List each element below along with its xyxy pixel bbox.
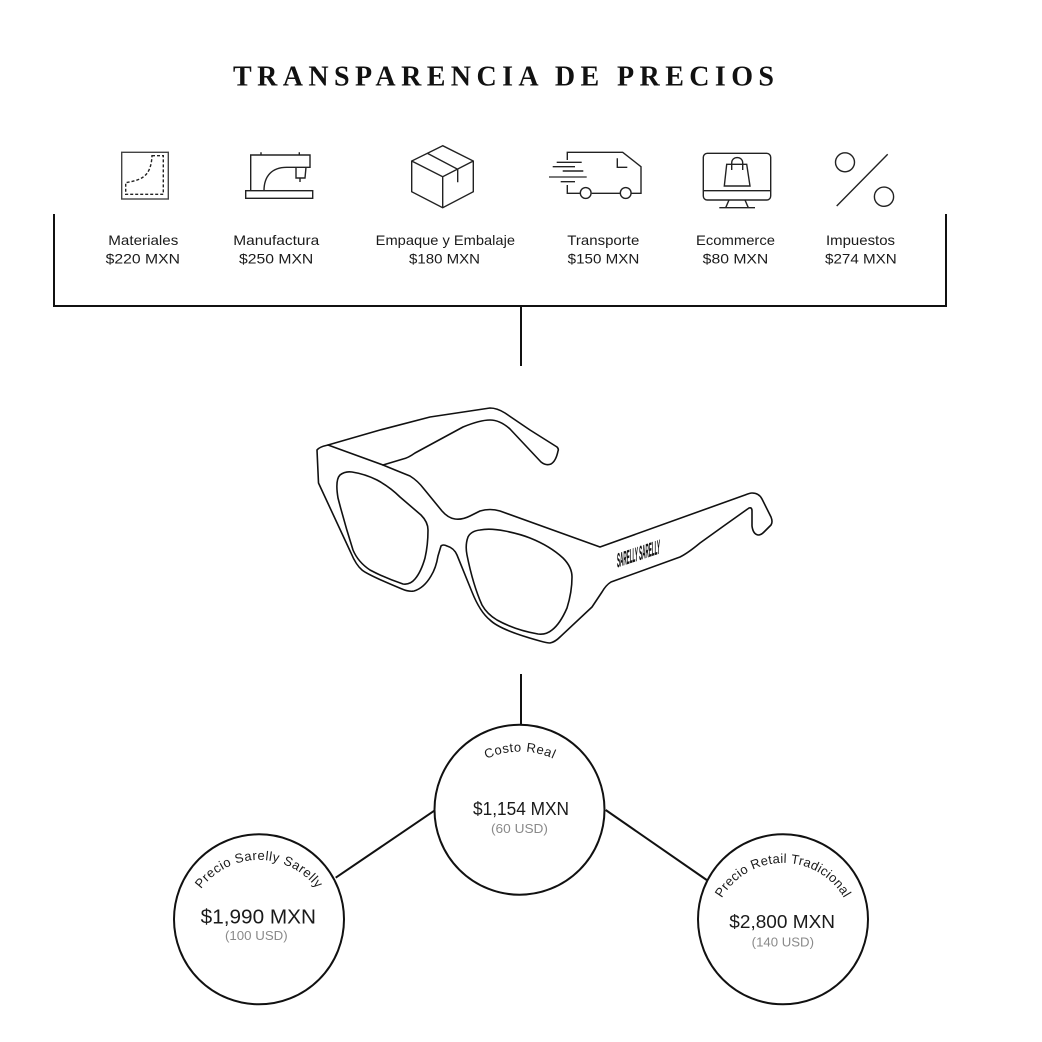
right lens (466, 529, 572, 634)
icon: percent sign (836, 153, 894, 206)
icon: sewing machine (246, 152, 313, 198)
icon: box (412, 146, 473, 208)
illustration: sunglasses: SARELLY SARELLY (617, 536, 660, 572)
glasses frame and near temple (317, 445, 772, 643)
usd: precio sarelly: (100 USD) (225, 928, 288, 943)
item: empaque y embalaje (376, 146, 515, 266)
usd: precio retail: (140 USD) (752, 935, 814, 950)
curved label: precio retail tradicional: Precio Retail Tradicional (714, 853, 852, 898)
label: transporte: Transporte (567, 232, 640, 248)
price: materiales: $220 MXN (106, 250, 180, 266)
left lens (337, 472, 428, 584)
price: transporte: $150 MXN (568, 250, 639, 266)
connector: real cost to retail price (606, 810, 707, 880)
curved label: costo real: Costo Real (484, 742, 556, 758)
price: precio retail: $2,800 MXN (729, 911, 835, 932)
illustration: sunglasses (317, 408, 772, 643)
item: impuestos (825, 153, 897, 266)
panel: cost breakdown (54, 146, 946, 306)
item: manufactura (233, 152, 320, 266)
price: ecommerce: $80 MXN (703, 250, 768, 266)
connector: glasses to real cost (520, 674, 522, 725)
bracket around cost items (54, 214, 946, 306)
title: TRANSPARENCIA DE PRECIOS (233, 62, 774, 92)
price: manufactura: $250 MXN (239, 250, 313, 266)
far temple (328, 408, 558, 465)
icon: fabric pattern (122, 152, 168, 199)
item: transporte (549, 152, 641, 266)
item: ecommerce (696, 153, 775, 266)
label: materiales: Materiales (108, 232, 178, 248)
circle: precio retail tradicional (697, 833, 869, 1006)
price: impuestos: $274 MXN (825, 250, 897, 266)
curved label: precio sarelly sarelly: Precio Sarelly Sarelly (194, 850, 322, 888)
price: precio sarelly: $1,990 MXN (201, 905, 316, 928)
price: empaque y embalaje: $180 MXN (409, 250, 480, 266)
label: impuestos: Impuestos (826, 232, 895, 248)
circle: costo real (434, 724, 606, 896)
connector: real cost to sarelly price (336, 811, 434, 878)
item: materiales (106, 152, 180, 266)
label: ecommerce: Ecommerce (696, 232, 775, 248)
icon: delivery truck (549, 152, 641, 198)
usd: costo real: (60 USD) (491, 821, 548, 836)
label: empaque y embalaje: Empaque y Embalaje (376, 232, 515, 248)
connector: bracket to glasses (520, 306, 522, 366)
circle: precio sarelly sarelly (173, 833, 345, 1006)
price: costo real: $1,154 MXN (473, 799, 569, 819)
label: manufactura: Manufactura (233, 232, 320, 248)
icon: monitor with shopping bag (703, 153, 771, 208)
